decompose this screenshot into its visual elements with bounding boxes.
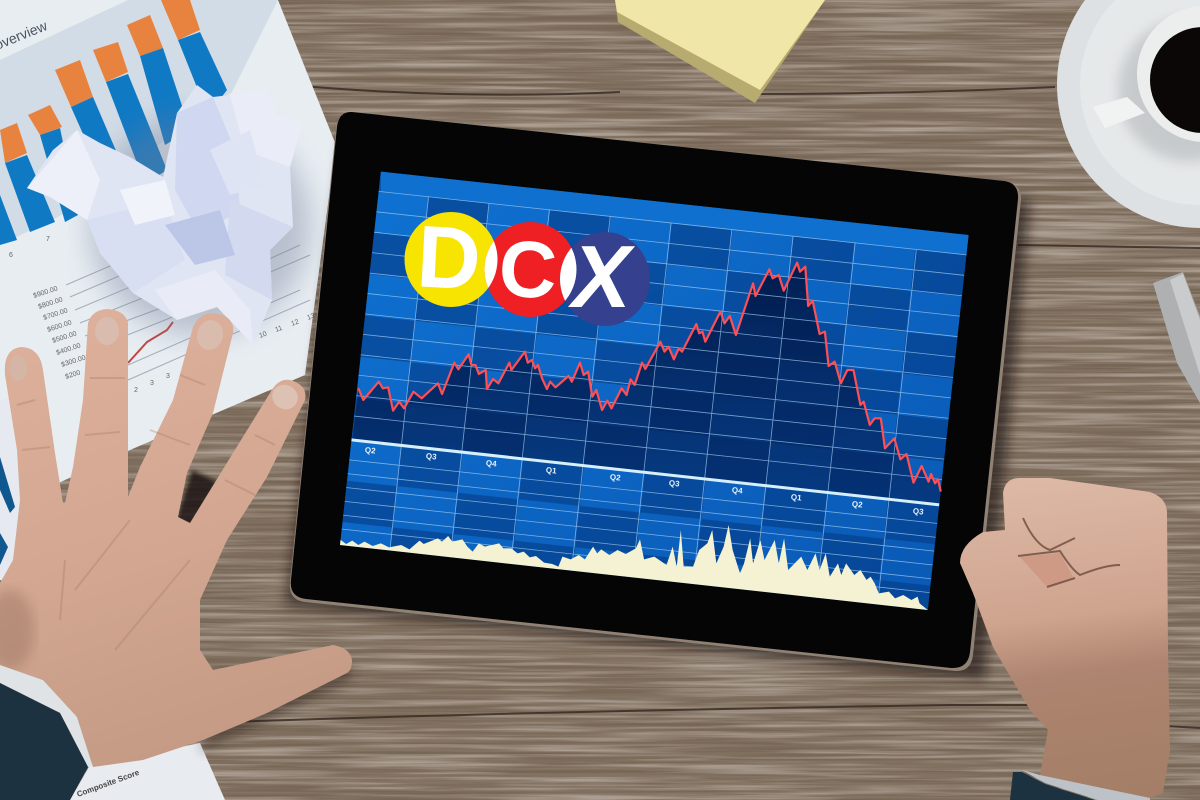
axis labels: $900.00 [32, 285, 59, 300]
tablet edge [290, 113, 1021, 671]
silver pen [1153, 272, 1200, 403]
baseline [340, 439, 944, 505]
DCX logo [404, 206, 650, 326]
arm hair shading [0, 590, 34, 670]
axis labels [9, 236, 316, 394]
paper: second sheet under hand [0, 395, 225, 800]
white overlap D and C [484, 241, 498, 288]
logo circle D [404, 212, 498, 307]
quarter labels: Q3 [668, 478, 681, 489]
quarter labels: Q4 [731, 485, 744, 496]
fist inner fold [1020, 553, 1073, 587]
axis labels: 12 [290, 319, 300, 328]
quarter labels [364, 445, 925, 517]
logo circle C [484, 222, 576, 317]
axis labels: $500.00 [51, 330, 78, 345]
letter D: D [415, 206, 483, 309]
letter C: C [497, 223, 559, 315]
tablet [285, 112, 1034, 680]
axis labels: 2 [134, 387, 138, 394]
sleeve cuff [0, 665, 93, 767]
hand outline with fingers [0, 309, 352, 767]
letter X: X [567, 227, 636, 326]
quarter labels: Q2 [609, 472, 622, 483]
axis labels: $300.00 [60, 354, 87, 369]
tablet body [291, 112, 1018, 668]
thumb shadow [200, 665, 352, 752]
quarter labels: Q2 [364, 445, 377, 456]
cuff [1022, 770, 1150, 800]
knuckle creases [17, 375, 275, 650]
sticky note pad [615, 0, 825, 103]
cup handle [1093, 97, 1145, 128]
left hand [0, 309, 352, 800]
axis labels: $800.00 [37, 296, 64, 311]
quarter labels: Q4 [485, 458, 498, 469]
top band [381, 172, 969, 255]
fist shape [960, 478, 1170, 798]
stacked bars [0, 0, 227, 245]
axis labels: $700.00 [42, 307, 69, 322]
alternating grid cells [342, 172, 966, 610]
fist creases [1018, 518, 1120, 587]
cup shadow [1118, 18, 1200, 162]
cup rim [1137, 6, 1200, 142]
quarter labels: Q1 [545, 465, 558, 476]
suit sleeve [0, 683, 88, 800]
quarter labels: Q3 [912, 506, 925, 517]
coffee cup on saucer [1057, 0, 1200, 228]
axis labels: $600.00 [46, 319, 73, 334]
chart background band [0, 0, 278, 245]
axis labels: 6 [9, 252, 13, 259]
small line chart [66, 240, 310, 380]
axis labels: $400.00 [55, 342, 82, 357]
crumpled paper ball [27, 85, 310, 345]
fingernails [9, 355, 27, 381]
finger gap shadow [176, 470, 218, 526]
quarter labels: Q3 [425, 451, 438, 462]
volume bars [340, 525, 928, 613]
right fist [960, 478, 1170, 800]
axis labels: 11 [274, 325, 284, 334]
tablet screen [340, 172, 969, 610]
axis labels: 10 [258, 331, 268, 340]
axis labels: 7 [46, 236, 50, 243]
logo circle X [560, 232, 650, 326]
tablet shadow [285, 125, 1030, 680]
axis labels: 3 [166, 373, 170, 380]
paper: bar chart report [0, 0, 336, 510]
axis labels: 13 [306, 313, 316, 322]
white overlap C and X [560, 248, 576, 301]
quarter labels: Q2 [851, 499, 864, 510]
coffee [1150, 27, 1200, 133]
price line [358, 263, 941, 492]
saucer [1057, 0, 1200, 228]
paper: second sheet under hand: Composite Score [76, 768, 141, 799]
area under price line [352, 263, 941, 505]
axis labels: $200 [64, 369, 82, 381]
axis labels: 3 [150, 380, 154, 387]
quarter labels: Q1 [790, 492, 803, 503]
grid lines [332, 186, 977, 608]
sleeve [1010, 772, 1095, 800]
